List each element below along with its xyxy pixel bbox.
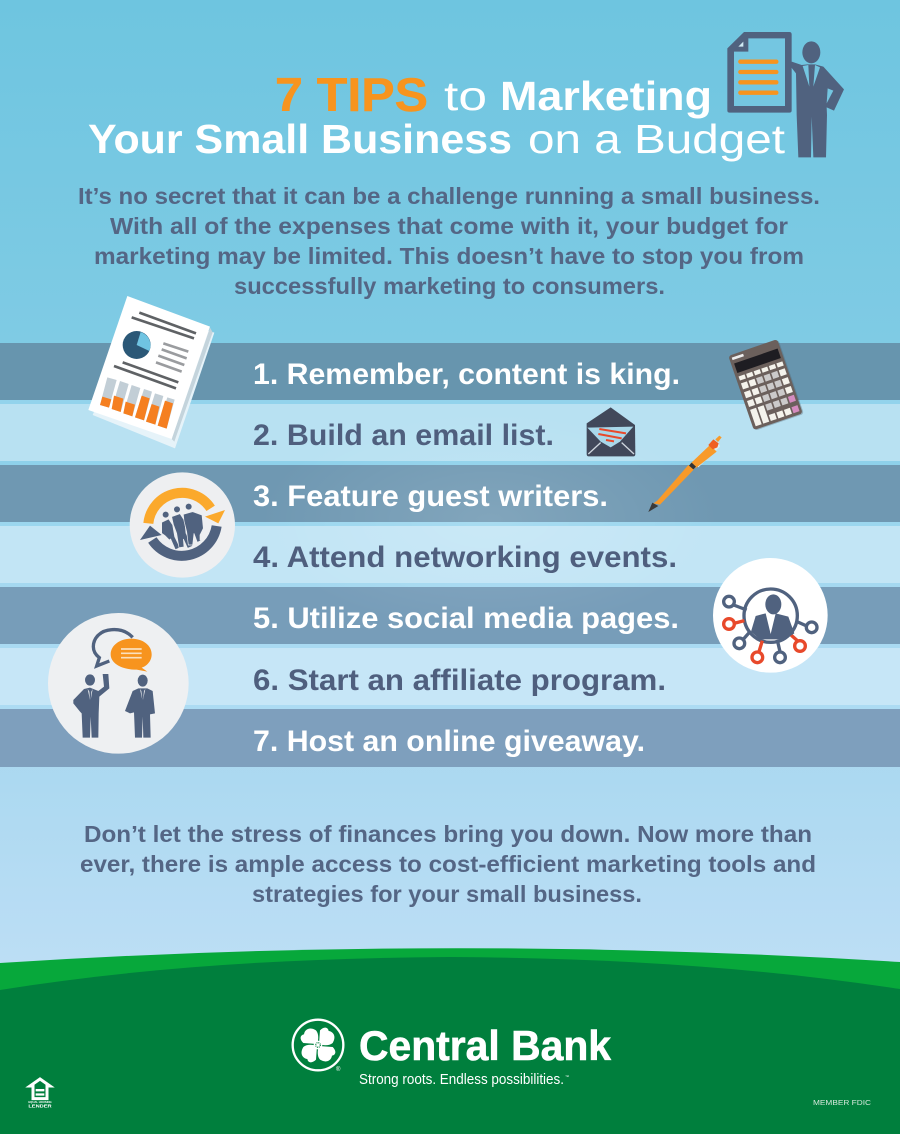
icon: network circle — [713, 558, 828, 673]
tips list: 6. Start an affiliate program. — [253, 664, 666, 697]
member fdic: MEMBER FDIC — [813, 1098, 872, 1107]
intro paragraph: successfully marketing to consumers. — [234, 273, 665, 299]
tips list — [253, 358, 680, 758]
closing paragraph: ever, there is ample access to cost-efficient marketing tools and — [80, 851, 816, 877]
logo: Central Bank — [293, 1020, 612, 1088]
title: 7 TIPS — [275, 68, 428, 121]
intro paragraph: It’s no secret that it can be a challenge running a small business. — [78, 183, 820, 209]
green footer — [0, 948, 900, 1134]
tips list: 5. Utilize social media pages. — [253, 602, 679, 635]
closing paragraph: strategies for your small business. — [252, 881, 642, 907]
logo: Central Bank: Strong roots. Endless possibilities. — [359, 1072, 564, 1088]
tip bands — [0, 343, 900, 767]
intro paragraph — [78, 183, 820, 299]
icon: report document — [88, 296, 214, 448]
title — [88, 68, 786, 162]
title: on a Budget — [528, 116, 786, 162]
icon: presenter with document — [727, 32, 844, 157]
intro paragraph: marketing may be limited. This doesn’t have to stop you from — [94, 243, 804, 269]
logo: Central Bank: ® — [336, 1066, 341, 1073]
closing paragraph: Don’t let the stress of finances bring you down. Now more than — [84, 821, 812, 847]
icon: team rotation circle — [130, 472, 235, 578]
icon: two people talking circle — [48, 613, 189, 754]
intro paragraph: With all of the expenses that come with it, your budget for — [110, 213, 788, 239]
title: Marketing — [500, 73, 712, 119]
logo: Central Bank: Central Bank — [359, 1022, 612, 1069]
icon: equal housing lender: LENDER — [28, 1103, 53, 1108]
tips list: 2. Build an email list. — [253, 419, 554, 452]
title: to — [444, 73, 487, 119]
closing paragraph — [80, 821, 816, 907]
icon: equal housing lender — [28, 1079, 53, 1108]
icon: pen — [648, 436, 722, 512]
icon: equal housing lender: EQUAL HOUSING — [28, 1100, 52, 1104]
title: Your Small Business — [88, 116, 512, 162]
tips list: 4. Attend networking events. — [253, 541, 677, 574]
icon: clover — [293, 1020, 343, 1070]
tips list: 1. Remember, content is king. — [253, 358, 680, 391]
logo: Central Bank: ™ — [565, 1074, 569, 1079]
icon: envelope — [587, 407, 635, 456]
tips list: 7. Host an online giveaway. — [253, 725, 645, 758]
tips list: 3. Feature guest writers. — [253, 480, 608, 513]
icon: calculator — [728, 339, 804, 431]
